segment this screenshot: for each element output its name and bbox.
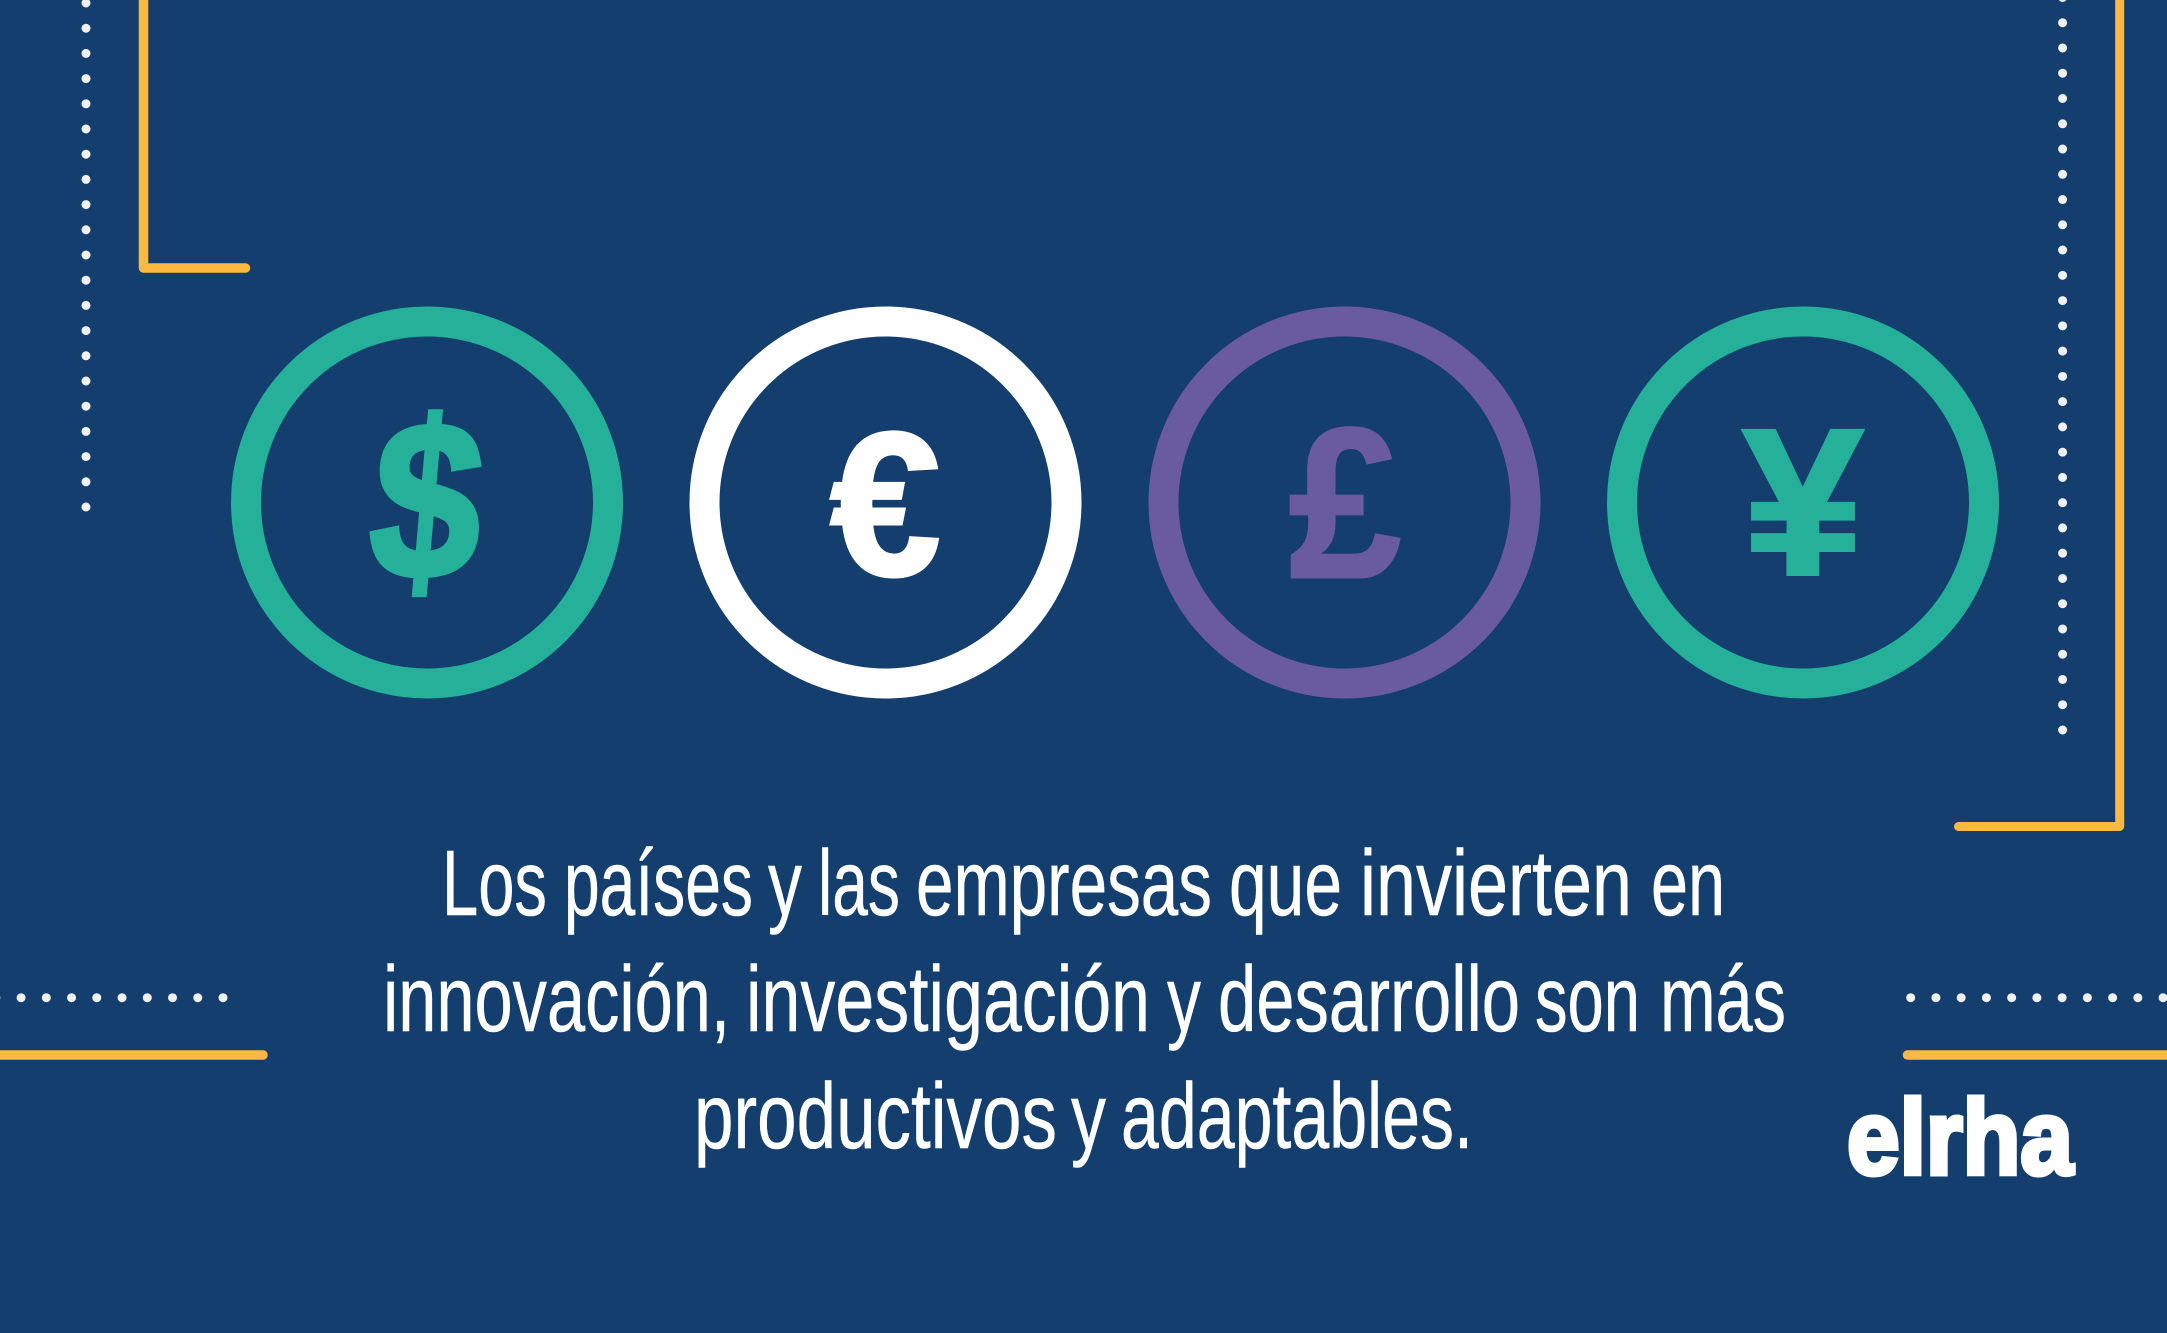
icon: euro coin: € (830, 390, 941, 619)
statement text: más (1660, 947, 1786, 1051)
statement text: empresas (916, 831, 1212, 935)
statement text (383, 831, 1786, 1168)
statement text: países (564, 831, 753, 935)
icon: yen coin (1622, 322, 1984, 684)
statement text: que (1229, 831, 1342, 935)
statement text: invierten (1360, 831, 1632, 935)
icon: dollar coin: $ (361, 375, 493, 626)
icon: yen coin: ¥ (1743, 387, 1863, 619)
icon: pound coin (1164, 322, 1526, 684)
statement text: son (1535, 947, 1640, 1051)
statement text: y (768, 831, 802, 935)
icon: dollar coin (246, 322, 608, 684)
icon: pound coin: £ (1289, 384, 1401, 623)
statement text: productivos (694, 1064, 1057, 1168)
statement text: adaptables. (1121, 1064, 1473, 1168)
statement text: desarrollo (1218, 947, 1520, 1051)
statement text: investigación (746, 947, 1150, 1051)
icon: euro coin (704, 322, 1066, 684)
statement text: y (1167, 947, 1201, 1051)
logo: elrha: elrha (1847, 1079, 2074, 1197)
statement text: innovación, (383, 947, 730, 1051)
statement text: en (1651, 831, 1725, 935)
statement text: las (818, 831, 900, 935)
statement text: Los (442, 831, 547, 935)
statement text: y (1071, 1064, 1106, 1168)
